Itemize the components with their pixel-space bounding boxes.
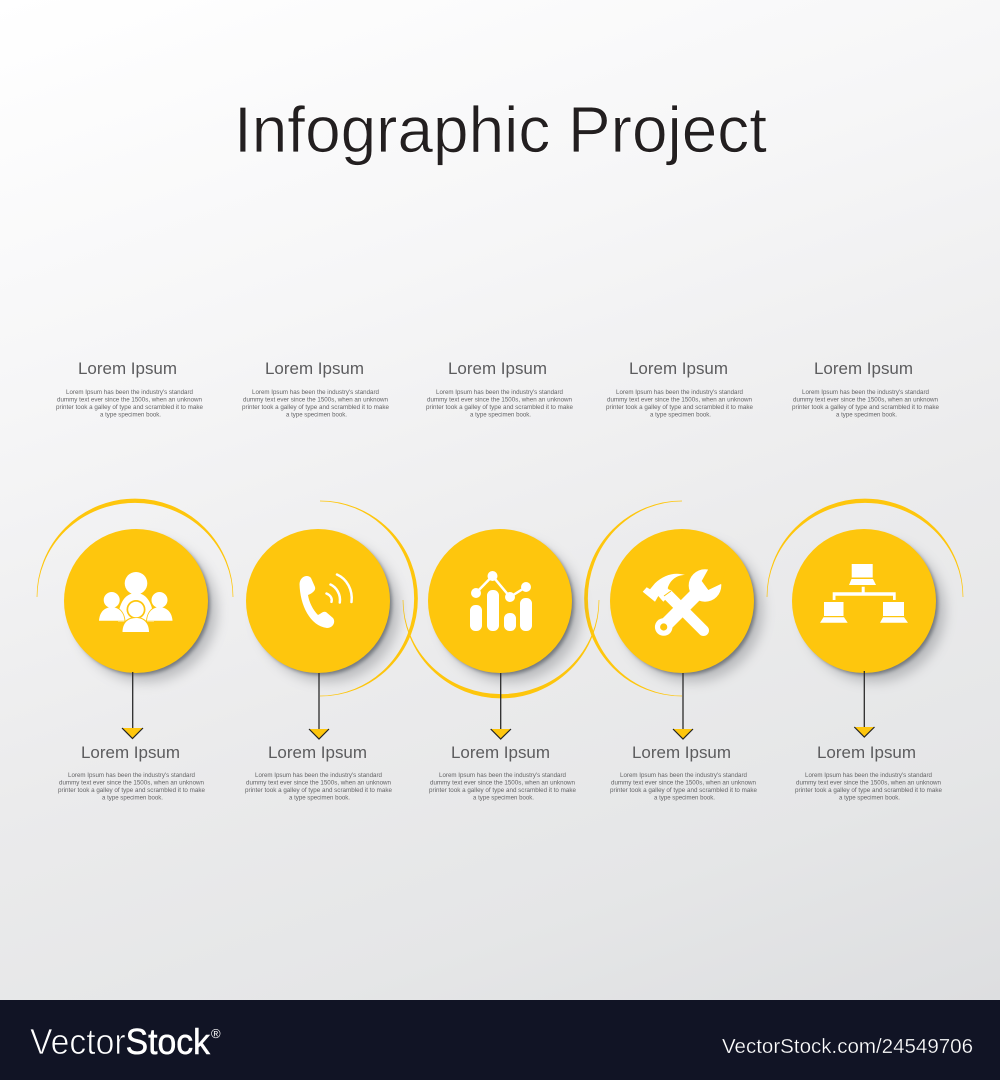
footer bar: [0, 1000, 1000, 1080]
ring arc 5: [767, 499, 963, 597]
bottom text block 3: dummy text ever since the 1500s, when an unknown: [430, 780, 575, 786]
top text block 2: [242, 359, 389, 418]
title: Infographic Project: [234, 93, 767, 166]
bottom text block 2: Lorem Ipsum has been the industry's standard: [255, 772, 382, 779]
step 2 circle with phone icon: [246, 529, 399, 682]
step 3 circle with chart icon: [428, 529, 581, 682]
arrow 3: [491, 673, 511, 739]
bottom text block 4: Lorem Ipsum: [632, 743, 731, 762]
bottom text block 3: Lorem Ipsum has been the industry's standard: [439, 772, 566, 779]
icon: phone: [300, 574, 352, 628]
bottom text block 1: [58, 743, 205, 802]
top text block 5: Lorem Ipsum: [814, 359, 913, 378]
top text block 2: Lorem Ipsum has been the industry's standard: [252, 389, 379, 396]
step 5 circle with network icon: [792, 529, 945, 682]
bottom text block 4: printer took a galley of type and scrambled it to make: [610, 787, 757, 794]
icon: bar and line chart: [470, 571, 532, 631]
ring arc 3: [403, 600, 599, 698]
ring arc 1: [37, 499, 233, 597]
top text block 4: a type specimen book.: [650, 412, 711, 418]
top text block 5: a type specimen book.: [836, 412, 897, 418]
icon: hammer and wrench: [643, 567, 726, 636]
top text block 4: Lorem Ipsum has been the industry's standard: [616, 389, 743, 396]
top text block 5: printer took a galley of type and scrambled it to make: [792, 404, 939, 411]
top text block 3: printer took a galley of type and scrambled it to make: [426, 404, 573, 411]
arrow 1: [122, 672, 143, 738]
top text block 3: Lorem Ipsum has been the industry's standard: [436, 389, 563, 396]
bottom text block 1: a type specimen book.: [102, 794, 163, 802]
top text block 2: a type specimen book.: [286, 412, 347, 418]
top text block 4: printer took a galley of type and scrambled it to make: [606, 404, 753, 411]
top text block 4: [606, 359, 753, 418]
bottom text block 3: [429, 743, 576, 802]
ring arc 2: [320, 501, 417, 696]
bottom text block 2: [245, 743, 392, 802]
bottom text block 4: [610, 743, 757, 802]
bottom text block 2: printer took a galley of type and scrambled it to make: [245, 787, 392, 794]
footer id: VectorStock.com/24549706: [722, 1036, 973, 1058]
bottom text block 5: printer took a galley of type and scrambled it to make: [795, 787, 942, 794]
footer logo: VectorStock: [30, 1021, 211, 1062]
top text block 3: a type specimen book.: [470, 412, 531, 418]
top text block 1: a type specimen book.: [100, 412, 161, 418]
bottom text block 3: Lorem Ipsum: [451, 743, 550, 762]
bottom text block 2: dummy text ever since the 1500s, when an unknown: [246, 780, 391, 786]
bottom text block 5: Lorem Ipsum has been the industry's standard: [805, 772, 932, 779]
top text block 1: Lorem Ipsum has been the industry's standard: [66, 389, 193, 396]
top text block 5: [792, 359, 939, 418]
registered mark: ®: [211, 1026, 221, 1041]
top text block 2: Lorem Ipsum: [265, 359, 364, 378]
icon: people: [98, 572, 174, 632]
bottom text block 5: Lorem Ipsum: [817, 743, 916, 762]
top text block 2: printer took a galley of type and scrambled it to make: [242, 404, 389, 411]
arrow 4: [673, 673, 693, 739]
step 1 circle with people icon: [64, 529, 217, 682]
bottom text block 1: dummy text ever since the 1500s, when an unknown: [59, 780, 204, 786]
bottom text block 1: Lorem Ipsum has been the industry's standard: [68, 772, 195, 779]
top text block 2: dummy text ever since the 1500s, when an unknown: [243, 396, 388, 404]
top text block 1: [56, 359, 203, 418]
top text block 1: dummy text ever since the 1500s, when an unknown: [57, 396, 202, 404]
top text block 5: Lorem Ipsum has been the industry's standard: [802, 389, 929, 396]
top text block 1: Lorem Ipsum: [78, 359, 177, 378]
step 4 circle with tools icon: [610, 529, 763, 682]
bottom text block 5: [795, 743, 942, 802]
top text block 4: dummy text ever since the 1500s, when an unknown: [607, 396, 752, 404]
top text block 5: dummy text ever since the 1500s, when an unknown: [793, 396, 938, 404]
top text block 3: Lorem Ipsum: [448, 359, 547, 378]
bottom text block 5: dummy text ever since the 1500s, when an unknown: [796, 780, 941, 786]
bottom text block 1: printer took a galley of type and scrambled it to make: [58, 787, 205, 794]
bottom text block 3: a type specimen book.: [473, 794, 534, 802]
bottom text block 4: Lorem Ipsum has been the industry's standard: [620, 772, 747, 779]
top text block 3: [426, 359, 573, 418]
arrow 5: [854, 671, 874, 737]
top text block 3: dummy text ever since the 1500s, when an unknown: [427, 396, 572, 404]
bottom text block 2: a type specimen book.: [289, 794, 350, 802]
bottom text block 3: printer took a galley of type and scrambled it to make: [429, 787, 576, 794]
ring arc 4: [584, 501, 682, 696]
bottom text block 2: Lorem Ipsum: [268, 743, 367, 762]
icon: network of laptops: [820, 564, 908, 623]
bottom text block 4: a type specimen book.: [654, 794, 715, 802]
top text block 1: printer took a galley of type and scrambled it to make: [56, 404, 203, 411]
top text block 4: Lorem Ipsum: [629, 359, 728, 378]
arrow 2: [309, 673, 329, 739]
bottom text block 5: a type specimen book.: [839, 794, 900, 802]
bottom text block 1: Lorem Ipsum: [81, 743, 180, 762]
bottom text block 4: dummy text ever since the 1500s, when an unknown: [611, 780, 756, 786]
